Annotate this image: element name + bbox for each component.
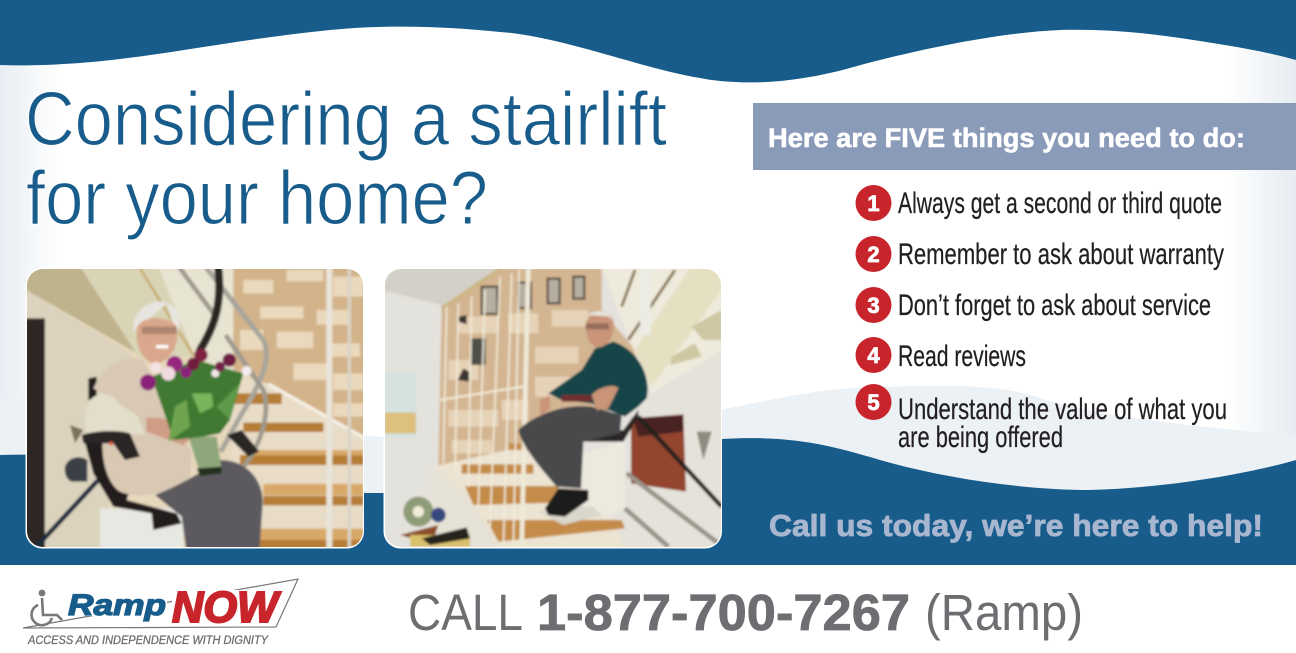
phone number: CALL	[408, 584, 523, 641]
sweater	[548, 342, 648, 417]
phone number: (Ramp)	[925, 584, 1083, 641]
logo: ACCESS AND INDEPENDENCE WITH DIGNITY	[27, 635, 269, 647]
item 2	[856, 236, 1224, 272]
item 4: 4	[867, 343, 880, 368]
hands	[592, 386, 618, 410]
wall hammers	[70, 425, 83, 443]
seat	[83, 377, 182, 530]
logo: NOW	[172, 583, 281, 632]
photo: woman on stairlift with tulips	[20, 260, 370, 553]
icon: wheelchair	[32, 590, 62, 625]
head	[586, 312, 614, 347]
left wall	[23, 288, 133, 553]
chair base	[100, 508, 183, 553]
item 4: Read reviews	[898, 340, 1026, 373]
logo: Ramp	[68, 589, 166, 622]
painting	[385, 374, 416, 437]
door	[23, 318, 45, 552]
item 5: are being offered	[898, 421, 1063, 454]
rails	[37, 268, 349, 550]
stairs	[232, 378, 363, 528]
shoes	[545, 488, 588, 517]
item 1	[856, 185, 1222, 221]
hands	[146, 418, 195, 445]
logo	[23, 579, 298, 647]
stairs	[438, 450, 624, 547]
upper right stairs	[602, 267, 722, 393]
head	[133, 301, 180, 337]
flowers	[400, 525, 438, 538]
item 1: 1	[867, 191, 880, 216]
title	[25, 77, 667, 241]
lift pedestal	[581, 460, 609, 518]
trousers	[518, 406, 622, 488]
ceiling	[385, 269, 498, 305]
phone number: 1-877-700-7267	[537, 584, 910, 641]
right wall	[628, 350, 722, 553]
armrest control	[82, 431, 140, 460]
title: for your home?	[26, 156, 488, 241]
tulip bouquet	[140, 348, 252, 476]
title: Considering a stairlift	[25, 77, 667, 162]
heading band	[753, 103, 1296, 170]
top wave	[0, 0, 1296, 82]
frames	[482, 277, 584, 314]
item 4	[856, 337, 1026, 373]
item 5	[856, 384, 1227, 454]
curved stringer	[431, 467, 499, 547]
item 3	[856, 287, 1211, 323]
balusters	[440, 270, 527, 547]
heading band: Here are FIVE things you need to do:	[768, 123, 1245, 153]
wallpaper	[233, 267, 367, 442]
phone number	[408, 584, 1083, 641]
cardigan	[93, 358, 192, 495]
trousers	[155, 460, 263, 553]
item 3: 3	[867, 293, 880, 318]
call to action: Call us today, we’re here to help!	[769, 508, 1263, 543]
photo: man on stairlift	[382, 267, 728, 553]
seat	[578, 410, 638, 442]
item 2: 2	[867, 242, 880, 267]
wallpaper	[438, 268, 638, 467]
item 5: 5	[867, 390, 880, 415]
wall rug	[631, 414, 686, 492]
handrail	[625, 473, 718, 547]
bottom wave	[0, 438, 1296, 565]
logo ramp outline	[23, 579, 298, 628]
under-stair ceiling	[27, 269, 135, 352]
